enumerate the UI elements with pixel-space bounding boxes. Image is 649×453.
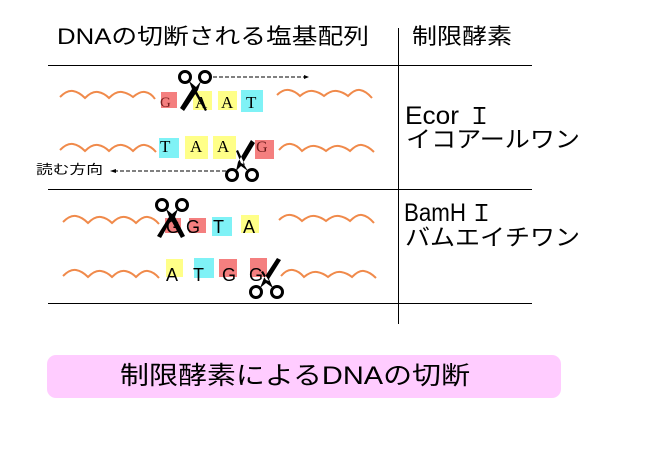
top sequence blocks: A: [243, 217, 255, 237]
label: EcoR I: Ecor: [405, 102, 459, 130]
icon: scissors bottom: [226, 140, 258, 180]
panel: EcoR I strands: [36, 72, 374, 180]
bottom sequence blocks: [159, 136, 274, 159]
panel: BamH I strands: [63, 200, 376, 298]
top sequence blocks: [160, 90, 263, 112]
DNA wavy strands: [63, 215, 376, 278]
label: BamH I katakana: バムエイチワン: [405, 224, 580, 250]
top sequence blocks: T: [213, 217, 224, 237]
arrow: right: [213, 75, 309, 79]
bottom sequence blocks: A: [217, 137, 230, 156]
label: EcoR I: Ｉ: [468, 103, 491, 129]
bottom sequence blocks: T: [160, 137, 171, 156]
label: EcoR I katakana: イコアールワン: [406, 126, 580, 152]
top sequence blocks: [165, 215, 259, 237]
top sequence blocks: G: [166, 217, 180, 237]
top sequence blocks: T: [246, 93, 257, 112]
arrow: reading direction: [110, 169, 226, 173]
top sequence blocks: A: [195, 93, 208, 112]
caption box: [47, 355, 561, 398]
icon: scissors top: [156, 200, 188, 238]
bottom sequence blocks: T: [193, 265, 204, 285]
top sequence blocks: G: [186, 217, 200, 237]
bottom sequence blocks: G: [222, 265, 236, 285]
heading: restriction enzyme: 制限酵素: [412, 24, 512, 49]
label: reading direction: 読む方向: [36, 162, 103, 177]
top sequence blocks: A: [221, 93, 234, 112]
label: BamH I: BamH: [404, 199, 466, 227]
bottom sequence blocks: G: [256, 139, 268, 156]
caption box: 制限酵素によるDNAの切断: [120, 362, 470, 390]
icon: scissors bottom: [250, 258, 282, 298]
icon: scissors top: [180, 72, 210, 111]
bottom sequence blocks: G: [249, 265, 263, 285]
bottom sequence blocks: A: [166, 265, 178, 285]
table lines: [48, 28, 532, 324]
bottom sequence blocks: A: [190, 137, 203, 156]
label: BamH I: Ｉ: [470, 200, 493, 226]
label: EcoR I: [405, 102, 491, 130]
bottom sequence blocks: [166, 258, 267, 285]
heading: DNA cut sequence: DNAの切断される塩基配列: [57, 24, 369, 49]
top sequence blocks: G: [160, 95, 171, 111]
DNA wavy strands: [60, 90, 374, 152]
